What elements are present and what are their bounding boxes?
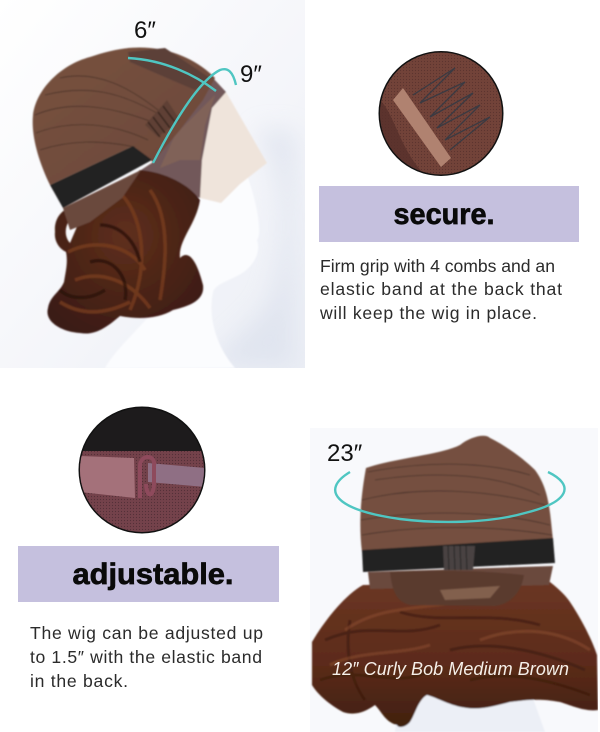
side comb [145,100,180,137]
nape panel [390,571,524,606]
text: adjustable description: The wig can be adjusted up [30,623,263,643]
elastic band [362,538,555,572]
text: adjustable description: to 1.5″ with the elastic band [30,647,262,667]
curly hair [47,170,203,334]
text: adjustable description [30,623,263,691]
measurement arc: 9 inch [153,69,236,163]
comb teeth [413,68,490,150]
label: 9 inch: 9″ [240,61,262,88]
mannequin neck [395,690,545,732]
wig lace front [141,92,267,203]
comb on band [443,546,475,570]
text: adjustable description: in the back. [30,671,128,691]
label: 6 inch: 6″ [134,17,156,44]
text: secure description [319,256,562,323]
text: secure description: will keep the wig in place. [319,303,537,323]
cap seam lines [35,76,170,150]
text: secure description: elastic band at the back that [320,279,562,299]
product caption: 12″ Curly Bob Medium Brown [332,659,569,679]
cap seam lines [361,464,552,535]
crown lace detail [128,48,210,90]
label: 23 inch: 23″ [327,440,363,467]
banner: adjustable: adjustable. [72,558,234,591]
mannequin head [105,175,259,368]
banner: secure: secure. [394,198,494,231]
photo: side view of wig on mannequin [0,0,305,368]
measurement ellipse [335,472,565,522]
fabric strap [80,456,135,498]
comb fabric strip [393,88,451,167]
straps [368,566,553,589]
wig cap back panel [63,170,141,230]
back hair [312,582,598,727]
banner: adjustable [18,546,279,602]
photo: back view of wig [310,428,598,732]
slider hook [140,457,154,498]
elastic band [50,146,152,208]
elastic strap [148,463,205,487]
circle photo: adjuster detail [78,406,208,536]
wig cap [33,47,215,185]
wig cap [360,436,553,552]
measurement arc: 6 inch [128,58,216,91]
text: secure description: Firm grip with 4 combs and an [320,256,555,276]
banner: secure [319,186,579,242]
circle photo: comb detail [378,51,504,176]
